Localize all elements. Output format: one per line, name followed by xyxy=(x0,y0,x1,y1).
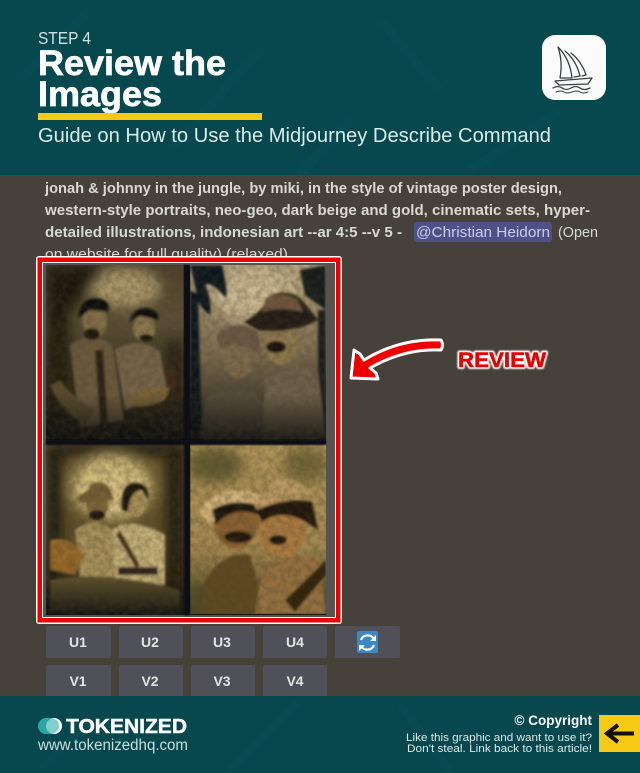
highlight frame xyxy=(36,256,342,624)
mention tag: @Christian Heidorn xyxy=(416,225,550,241)
chat prompt text: (Open xyxy=(558,225,598,241)
copyright note xyxy=(406,713,592,755)
image panel: two explorers in golden clearing xyxy=(46,444,186,614)
icon: yellow back arrow xyxy=(599,715,640,752)
chat prompt text: detailed illustrations, indonesian art --ar 4:5 --v 5 - xyxy=(45,225,402,241)
title: Images xyxy=(38,75,162,114)
logo: tokenized: TOKENIZED xyxy=(66,716,187,738)
image divider lines xyxy=(46,265,326,615)
copyright note: Don't steal. Link back to this article! xyxy=(407,743,592,755)
action buttons: U4 xyxy=(286,634,304,650)
chat prompt text: western-style portraits, neo-geo, dark beige and gold, cinematic sets, hyper- xyxy=(44,203,590,219)
action buttons: U2 xyxy=(141,634,159,650)
title: Review the xyxy=(38,44,226,83)
review label: REVIEW xyxy=(458,349,546,372)
header band xyxy=(0,0,640,175)
website url: www.tokenizedhq.com xyxy=(37,737,188,754)
chat prompt text: jonah & johnny in the jungle, by miki, in the style of vintage poster design, xyxy=(44,181,562,197)
action buttons: U1 xyxy=(69,634,87,650)
chat prompt text: on website for full quality) (relaxed) xyxy=(45,247,288,263)
icon: refresh xyxy=(357,631,378,653)
step label: STEP 4 xyxy=(38,28,91,48)
image texture overlay xyxy=(46,265,326,615)
chat prompt text xyxy=(44,181,598,263)
image panel: two close-up explorers with straw hats xyxy=(187,444,327,614)
logo mark xyxy=(38,718,62,734)
footer band xyxy=(0,696,640,773)
arrow: pointing to images xyxy=(351,340,442,379)
action buttons: V3 xyxy=(213,673,231,689)
action buttons: U3 xyxy=(213,634,231,650)
image grid with highlight frame xyxy=(36,256,342,624)
action buttons: V2 xyxy=(141,673,159,689)
subtitle: Guide on How to Use the Midjourney Describe Command xyxy=(38,125,551,147)
image panel: two men in sepia jungle xyxy=(46,265,184,441)
icon: midjourney sailboat xyxy=(542,35,606,100)
image panel: two men with hats, pale jungle xyxy=(190,265,326,441)
action buttons: V1 xyxy=(69,673,87,689)
review label: REVIEW xyxy=(458,349,546,372)
action buttons: V4 xyxy=(286,673,304,689)
title xyxy=(38,44,226,114)
action buttons xyxy=(46,626,400,698)
copyright note: Like this graphic and want to use it? xyxy=(406,732,592,744)
copyright note: © Copyright xyxy=(515,713,592,728)
title underline xyxy=(38,113,262,120)
